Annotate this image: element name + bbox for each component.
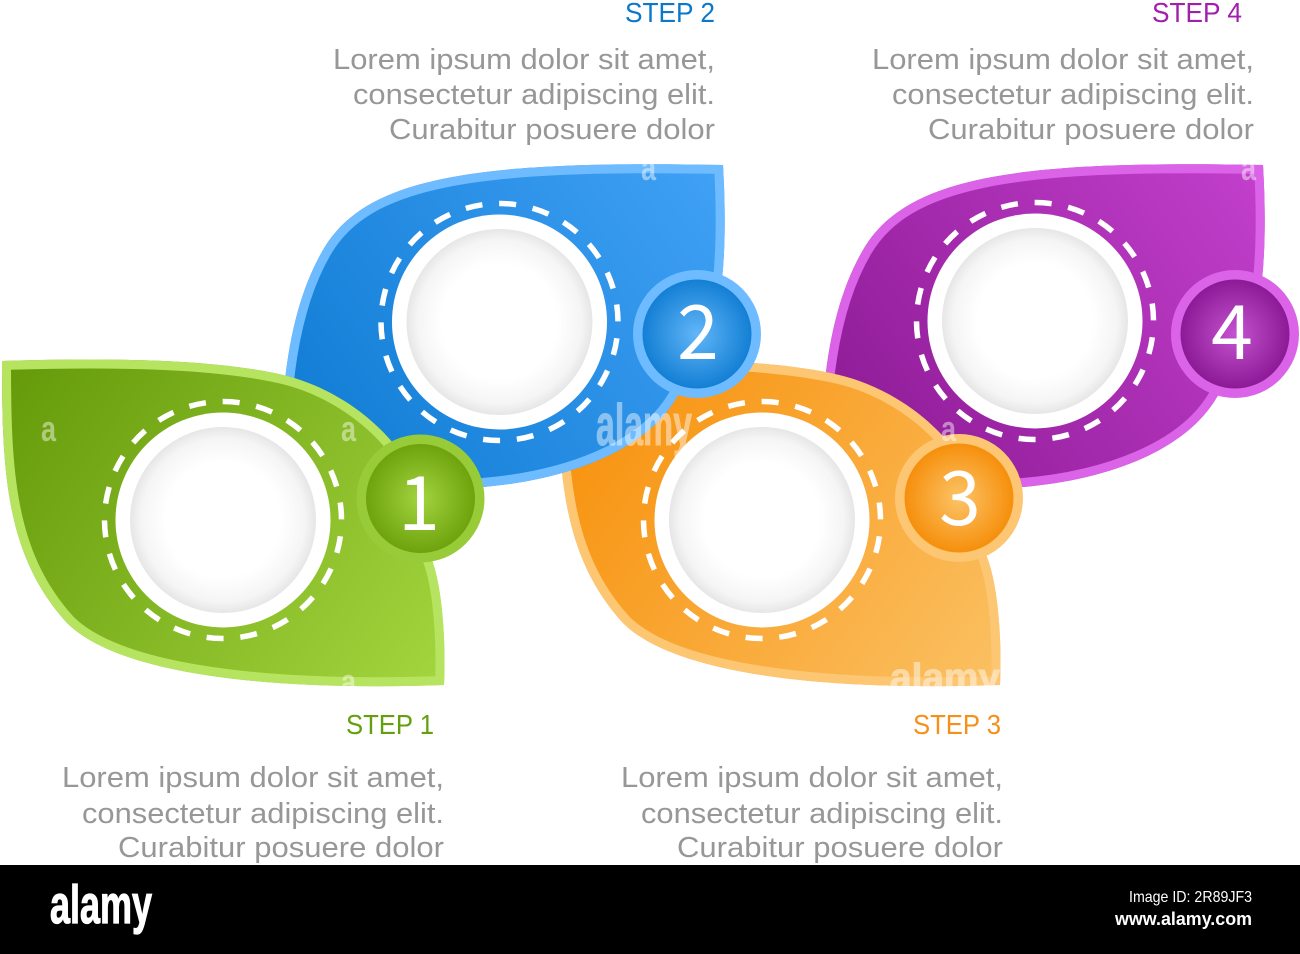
text block: step 4 description: consectetur adipiscing elit. [892,79,1254,111]
panel: step 4 purple leaf [821,164,1299,490]
leaf shape: green [2,359,445,686]
text block: step 2 description: Lorem ipsum dolor sit amet, [333,44,715,76]
watermarks: alamy [596,393,692,458]
image circle: step 4 [900,186,1170,456]
watermarks [41,147,1257,702]
text block: step 1 description [62,762,444,864]
website: www.alamy.com [1114,909,1252,929]
leaf shape: purple [821,164,1265,490]
image circle: step 3 [627,385,897,655]
number badge 1: 1 [398,443,440,552]
number badge 4 [1171,270,1299,398]
heading: STEP 1: STEP 1 [346,709,434,740]
text block: step 4 description [872,44,1254,146]
logo: alamy: alamy [50,875,152,935]
watermarks: a [341,408,357,449]
text block: step 1 description: consectetur adipiscing elit. [82,798,444,830]
watermarks: a [1241,147,1257,188]
number badge 2: 2 [677,272,719,381]
number badge 3 [895,434,1023,562]
number badge 3: 3 [939,438,981,547]
text block: step 1 description: Curabitur posuere dolor [118,832,444,864]
watermarks: a [341,661,357,702]
watermarks: a [41,408,57,449]
text block: step 4 description: Lorem ipsum dolor sit amet, [872,44,1254,76]
number badge 1 [356,434,484,562]
footer bar [0,865,1300,954]
watermarks: a [941,408,957,449]
text block: step 1 description: Lorem ipsum dolor sit amet, [62,762,444,794]
watermarks: a [641,147,657,188]
panel: step 3 orange leaf [558,359,1023,686]
text block: step 3 description: Curabitur posuere dolor [677,832,1003,864]
image id: Image ID: 2R89JF3 [1129,889,1252,906]
text block: step 2 description: Curabitur posuere dolor [389,114,715,146]
panel: step 2 blue leaf [281,164,761,490]
text block: step 4 description: Curabitur posuere dolor [928,114,1254,146]
text block: step 3 description: Lorem ipsum dolor sit amet, [621,762,1003,794]
image circle: step 2 [365,187,634,457]
heading: STEP 3: STEP 3 [913,709,1001,740]
leaf shape: orange [558,359,1001,686]
number badge 4: 4 [1211,272,1253,381]
text block: step 3 description [621,762,1003,864]
leaf shape: blue [281,164,725,490]
number badge 2 [633,270,761,398]
image circle: step 1 [88,385,358,655]
panel: step 1 green leaf [2,359,484,686]
watermarks: alamy [890,657,1000,699]
text block: step 2 description: consectetur adipiscing elit. [353,79,715,111]
text block: step 3 description: consectetur adipiscing elit. [641,798,1003,830]
text block: step 2 description [333,44,715,146]
